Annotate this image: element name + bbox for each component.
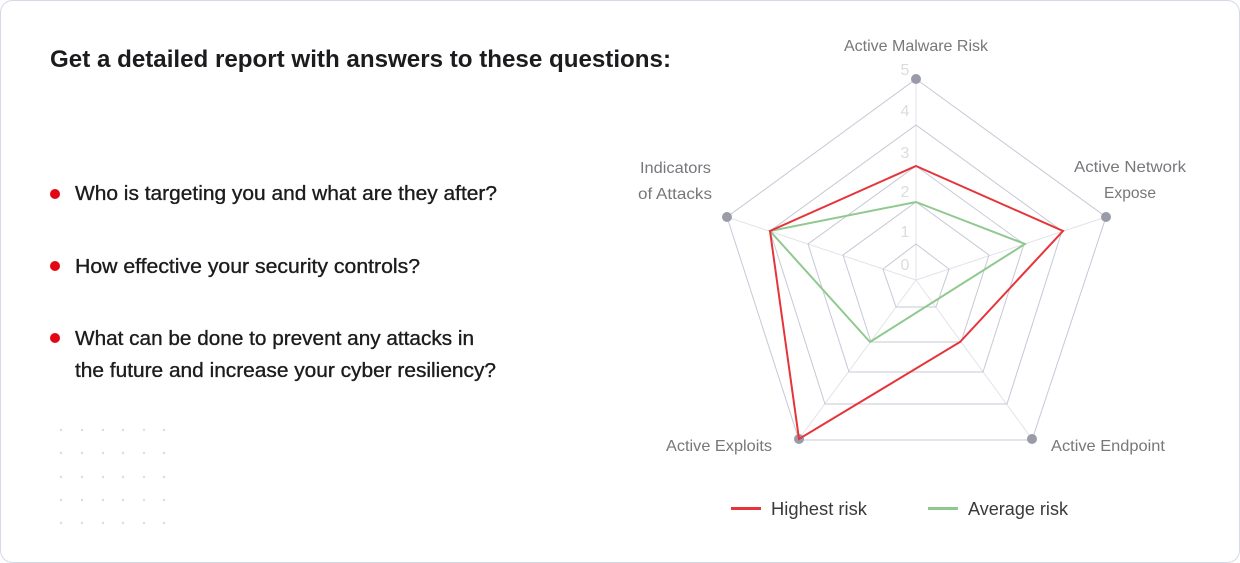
radar chart	[638, 38, 1187, 455]
series: highest risk	[770, 166, 1063, 439]
axis scale numbers: 4	[901, 103, 910, 120]
bullet item: security controls: How effective your security controls?	[75, 256, 420, 278]
axis scale numbers	[901, 62, 910, 274]
legend item: highest risk	[731, 499, 868, 519]
axis labels: of Attacks	[638, 186, 712, 203]
axis labels: Indicators	[640, 160, 711, 177]
legend	[731, 499, 1069, 519]
bullet list	[50, 183, 497, 382]
vertex markers	[722, 74, 1111, 444]
axis labels: Active Malware Risk	[844, 38, 989, 55]
axis labels: Expose	[1104, 185, 1156, 202]
series: average risk	[770, 202, 1025, 342]
axis scale numbers: 1	[901, 224, 910, 241]
bullet item: who is targeting you: Who is targeting you and what are they after?	[75, 183, 497, 205]
axis scale numbers: 0	[901, 257, 910, 274]
bullet item: prevent attacks: What can be done to prevent any attacks in	[75, 328, 474, 350]
radar rings	[727, 79, 1106, 440]
radar spokes	[727, 79, 1106, 439]
decorative dot grid	[60, 429, 165, 524]
axis scale numbers: 3	[901, 145, 910, 162]
title: Get a detailed report with answers to these questions:	[50, 46, 671, 73]
axis labels	[638, 38, 1187, 455]
legend item: highest risk: Highest risk	[771, 499, 868, 519]
axis labels: Active Endpoint	[1051, 438, 1166, 455]
legend item: average risk: Average risk	[968, 499, 1069, 519]
axis scale numbers: 2	[901, 184, 910, 201]
axis scale numbers: 5	[901, 62, 910, 79]
bullet item: prevent attacks: the future and increase your cyber resiliency?	[75, 360, 496, 382]
axis labels: Active Network	[1074, 159, 1187, 176]
axis labels: Active Exploits	[666, 438, 772, 455]
bullet item: prevent attacks	[50, 328, 496, 382]
